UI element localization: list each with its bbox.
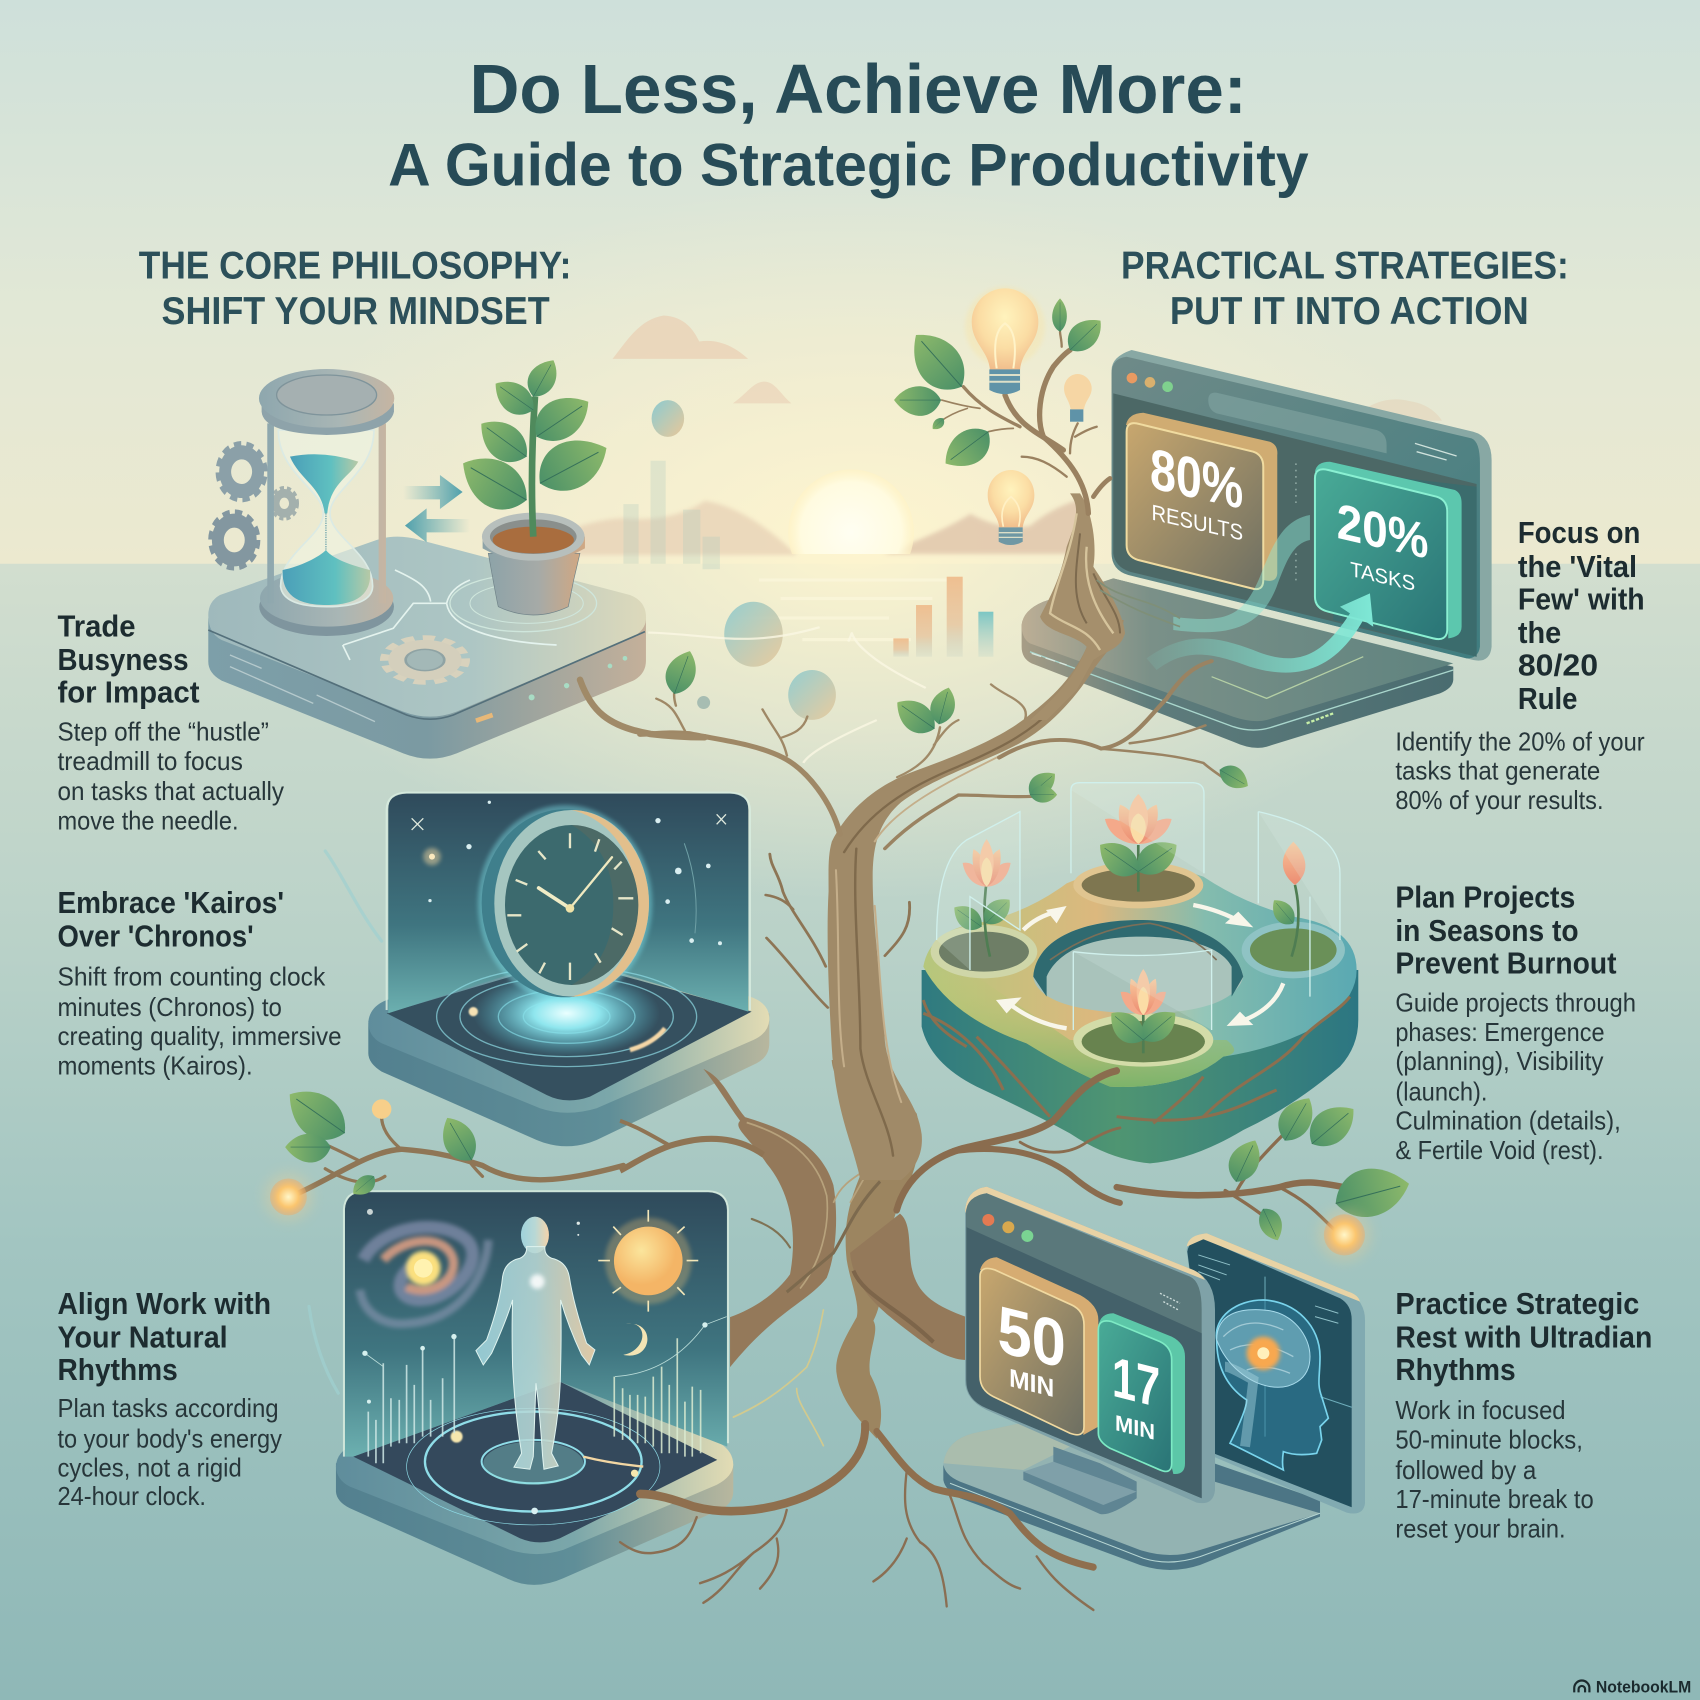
stems and leaves	[984, 845, 1298, 1053]
far left streaks	[309, 851, 382, 1393]
text: seasons: Prevent Burnout	[1395, 948, 1617, 981]
lower trunk	[832, 1060, 919, 1439]
right C branch	[850, 1214, 967, 1360]
text: seasons: phases: Emergence	[1395, 1017, 1605, 1047]
text: vital few: Identify the 20% of your	[1395, 726, 1645, 756]
illustration: growth ring with flowers	[922, 783, 1358, 1163]
gears	[216, 442, 267, 502]
illustration: 80/20 screen: 80%	[1150, 436, 1243, 522]
heading: practical strategies: PRACTICAL STRATEGIES:	[1121, 245, 1569, 288]
illustration: 80/20 screen: RESULTS	[1151, 500, 1243, 546]
text: vital few: tasks that generate	[1395, 756, 1600, 786]
text: natural rhythms: cycles, not a rigid	[57, 1453, 242, 1483]
text: natural rhythms	[57, 1288, 282, 1511]
illustration: hourglass and plant on platform	[208, 353, 646, 759]
text: vital few: Rule	[1518, 683, 1577, 716]
text: vital few: Focus on	[1518, 517, 1640, 550]
small bulb	[1064, 374, 1092, 422]
trunk mass	[828, 620, 1124, 1180]
tree: upper crown	[894, 287, 1180, 720]
text: natural rhythms: to your body's energy	[57, 1423, 282, 1453]
title: Do Less, Achieve More:	[469, 50, 1247, 128]
text: trade busyness: Busyness	[57, 644, 189, 677]
text: strategic rest	[1395, 1288, 1652, 1543]
head silhouette	[1216, 1300, 1328, 1470]
text: strategic rest: 17-minute break to	[1395, 1484, 1594, 1514]
monitor	[1112, 350, 1492, 661]
title	[388, 50, 1309, 198]
text: seasons: Culmination (details),	[1395, 1106, 1621, 1136]
heading: practical strategies: PUT IT INTO ACTION	[1170, 290, 1529, 333]
glass cylinders	[937, 783, 1340, 1030]
vines	[923, 997, 1350, 1123]
card 17	[1098, 1313, 1185, 1474]
sun	[605, 1218, 692, 1304]
left twigs	[295, 1149, 623, 1195]
lower bulb	[988, 470, 1034, 545]
leaves on tree	[277, 646, 1415, 1245]
growth arrow	[1173, 515, 1310, 632]
illustration: 80/20 screen: 20%	[1337, 492, 1428, 570]
illustration: monitor with timers and brain: 50	[998, 1292, 1066, 1383]
big bulb	[965, 287, 1045, 394]
text: seasons: (planning), Visibility	[1395, 1046, 1604, 1076]
heading: practical strategies	[1121, 245, 1569, 333]
text: vital few: the 'Vital	[1518, 551, 1637, 584]
floating orbs	[652, 400, 684, 437]
text: seasons: Guide projects through	[1395, 988, 1636, 1018]
monitor	[965, 1187, 1215, 1503]
pots	[931, 925, 1037, 978]
text: kairos: moments (Kairos).	[57, 1050, 253, 1080]
heading: core philosophy	[139, 245, 571, 333]
illustration: monitor with timers and brain: MIN	[1009, 1364, 1054, 1403]
text: natural rhythms: 24-hour clock.	[57, 1481, 206, 1511]
distant bars	[623, 461, 720, 569]
clock	[478, 805, 652, 1002]
horizon scenery	[510, 315, 1442, 763]
water reflections	[737, 580, 954, 640]
text: strategic rest: reset your brain.	[1395, 1513, 1566, 1543]
tree: far branches	[295, 680, 1366, 1393]
text: kairos: Shift from counting clock	[57, 962, 326, 992]
moon	[623, 1324, 647, 1356]
human figure	[521, 1217, 549, 1253]
rising bars	[893, 577, 993, 657]
card 50	[980, 1257, 1098, 1435]
card 20%	[1315, 462, 1462, 638]
text: strategic rest: Rest with Ultradian	[1395, 1322, 1652, 1355]
text: trade busyness: on tasks that actually	[57, 776, 284, 806]
text: strategic rest: Rhythms	[1395, 1354, 1516, 1387]
illustration: 80/20 screen: TASKS	[1350, 558, 1415, 596]
glowing orbs	[265, 1099, 1370, 1261]
arrows	[403, 475, 463, 509]
tree: upper trunk and branches	[640, 620, 1228, 1180]
text: vital few: 80/20	[1518, 649, 1598, 682]
text: seasons: (launch).	[1395, 1076, 1487, 1106]
text: strategic rest: Practice Strategic	[1395, 1288, 1639, 1321]
heading: core philosophy: SHIFT YOUR MINDSET	[162, 290, 550, 333]
platform root	[580, 680, 705, 737]
plant pot	[488, 553, 580, 615]
text: kairos	[57, 887, 342, 1080]
text: seasons	[1395, 881, 1636, 1165]
text: vital few: Few' with	[1518, 583, 1645, 616]
right main branches	[897, 1071, 1117, 1210]
heading: core philosophy: THE CORE PHILOSOPHY:	[139, 245, 571, 288]
pale vine	[733, 1310, 823, 1446]
text: kairos: minutes (Chronos) to	[57, 992, 282, 1022]
text: trade busyness: move the needle.	[57, 805, 239, 835]
crown branches	[940, 332, 1110, 513]
text: kairos: Over 'Chronos'	[57, 920, 254, 953]
text: kairos: Embrace 'Kairos'	[57, 887, 284, 920]
text: seasons: Plan Projects	[1395, 881, 1575, 914]
stars	[428, 801, 722, 945]
energy bars	[368, 1337, 454, 1463]
illustration: human rhythms	[336, 1191, 733, 1585]
clouds	[613, 315, 748, 359]
text: natural rhythms: Your Natural	[57, 1322, 228, 1355]
crown leaves	[899, 322, 977, 402]
illustration: monitor with timers and brain: 17	[1112, 1345, 1160, 1420]
galaxy	[360, 1227, 488, 1324]
flow arrows	[1007, 905, 1283, 1028]
crown base	[1030, 493, 1125, 720]
back panel	[1187, 1233, 1365, 1514]
text: strategic rest: 50-minute blocks,	[1395, 1424, 1583, 1454]
tree: lower roots and side branches	[620, 1071, 1120, 1610]
orbit rings	[407, 1408, 660, 1525]
text: natural rhythms: Rhythms	[57, 1354, 178, 1387]
illustration: 80/20 screen	[1022, 350, 1492, 748]
text: strategic rest: followed by a	[1395, 1455, 1537, 1485]
text: kairos: creating quality, immersive	[57, 1021, 342, 1051]
illustration: monitor with timers and brain	[943, 1187, 1365, 1570]
flat gear	[385, 638, 465, 682]
paths on ground	[648, 627, 926, 763]
illustration: clock on platform	[368, 793, 769, 1146]
mountains	[510, 501, 797, 555]
side twigs	[766, 854, 910, 1008]
ripples	[437, 967, 697, 1067]
text: strategic rest: Work in focused	[1395, 1395, 1566, 1425]
right root	[877, 1431, 1093, 1567]
illustration: monitor with timers and brain: MIN	[1115, 1410, 1155, 1445]
text: trade busyness: for Impact	[57, 677, 199, 710]
text: trade busyness: treadmill to focus	[57, 746, 243, 776]
hourglass	[259, 577, 394, 636]
left root	[640, 1424, 865, 1511]
left big branch	[703, 1069, 836, 1367]
flowers	[963, 839, 1011, 887]
trunk strands	[844, 709, 1052, 1156]
text: natural rhythms: Plan tasks according	[57, 1393, 279, 1423]
stand	[1023, 1447, 1137, 1514]
right twigs	[1117, 1182, 1366, 1195]
text: seasons: in Seasons to	[1395, 915, 1579, 948]
title: A Guide to Strategic Productivity	[388, 130, 1309, 198]
text: vital few: the	[1518, 617, 1561, 650]
right branches	[999, 661, 1211, 758]
tree: rear trunk and big branches	[620, 1060, 967, 1439]
card 80%	[1126, 413, 1277, 581]
circuit lines	[343, 570, 557, 660]
sun	[790, 478, 913, 554]
notebooklm mark: NotebookLM	[1596, 1678, 1691, 1696]
text: trade busyness: Step off the “hustle”	[57, 716, 269, 746]
text: trade busyness: Trade	[57, 610, 136, 643]
text: vital few: 80% of your results.	[1395, 785, 1604, 815]
text: vital few	[1395, 517, 1645, 815]
left branch	[640, 733, 840, 834]
branch strands	[747, 1123, 887, 1289]
top twigs	[897, 684, 1026, 777]
text: seasons: & Fertile Void (rest).	[1395, 1135, 1604, 1165]
text: natural rhythms: Align Work with	[57, 1288, 271, 1321]
text: trade busyness	[57, 610, 284, 835]
